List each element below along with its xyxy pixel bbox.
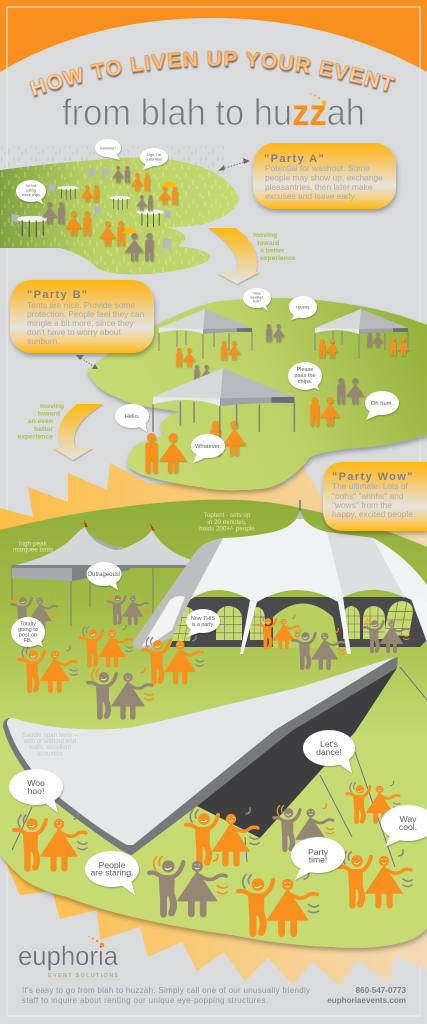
front orange pair [146,433,187,473]
moving toward an even better experience: experience [17,434,53,440]
tent guy lines [12,667,427,867]
bubble: Way cool [381,805,427,847]
bubble: Totally: going to [18,627,38,633]
bubble: chips: I'm not [26,184,36,188]
Toptent caption: in 20 minutes, [207,519,247,526]
logo [18,936,119,979]
bubble: Woo hoo: hoo! [28,786,44,796]
rain above party A meadow [0,146,225,176]
white canopy [190,518,427,606]
contact details: euphoriaevents.com [327,996,406,1005]
bubble: People are staring: People [99,860,126,870]
Party A text: Potential for washout. Some [265,163,370,173]
contact details: 860-547-0773 [356,986,406,995]
Toptent caption: Toptent - sets up [204,512,251,519]
Party B heading: "Party B" [27,289,89,301]
people group B [176,324,410,456]
subtitle: from blah to huzzah [62,92,365,133]
umbrellas [122,181,177,233]
dark wall [170,597,427,647]
Toptent caption: holds 200+/- people [199,526,255,532]
bubble: Whatever [191,434,225,463]
Party Wow text: happy, excited people. [332,509,415,519]
bubble: Ugh: Ugh, I'm [147,153,161,157]
back zigzag bunting [0,463,427,560]
bubble: Nice weather [243,288,271,311]
bubble: Nice weather: weather, [250,296,264,300]
moving toward a better experience: a better [260,248,285,254]
moving toward an even better experience: moving [40,403,64,410]
chairs [10,168,172,255]
bubble: Totally [11,617,45,647]
double arrow B [76,355,98,369]
bubble: Nice weather: Nice [253,292,261,296]
Party A heading: "Party A" [264,153,325,165]
moving toward an even better experience: toward [38,410,60,418]
Party B text: Tents are nice. Provide some [27,300,135,310]
saddle span caption: with or without end [23,738,77,745]
bubble: Ugh [140,148,168,170]
tent B small left [159,309,252,359]
bubble: Nice weather: huh? [253,300,261,304]
Party B text: protection. People feel they can [27,309,145,319]
panel: Party A [253,143,396,209]
moving toward an even better experience: better [34,426,53,433]
bubble: Oh hum: Oh hum. [371,401,394,407]
bubble: Hello [115,404,149,432]
footer text: staff to inquire about renting our unique eye-popping structures. [22,996,268,1005]
panel: Party Wow [323,462,427,531]
bubble: Way cool: cool. [399,822,417,832]
logo tagline: EVENT SOLUTIONS [48,973,118,979]
canopy pillars [240,596,427,654]
bubble: People are staring [85,851,139,895]
canopy right panel [327,532,405,598]
bubble: Woo hoo: Woo [27,778,45,788]
people behind tents [194,332,383,383]
tent B small right [315,309,408,359]
bubble: chips: eating [26,188,36,192]
footer text: It's easy to go from blah to huzzah. Simply call one of our unusually friendly [22,986,310,995]
saddle span caption: Saddle span tents – [22,732,78,739]
party A people [42,166,178,261]
moving toward an even better experience: an even [28,418,53,425]
high-peak caption: high-peak [19,540,48,548]
bubble: Whatever: Whatever. [195,444,221,450]
bubble: Let's dance [303,730,355,773]
top tent [133,500,427,654]
bubble: Party time: time! [309,854,327,864]
bubble: Woo hoo [9,769,63,813]
bubble: chips: those chips [22,193,40,197]
bubble: Now THIS: is a party. [192,622,214,628]
double arrow A [218,158,250,171]
panel: party B meadow [87,298,427,490]
bubble: I guess: I guess. [296,304,310,310]
arrow: toward even better experience [53,404,103,460]
panel: Party B [10,280,154,353]
bubble: Please pass: pass the [294,373,316,379]
Party Wow text: "oohs" "ahhhs" and [332,491,404,501]
bottom zigzag bunting [0,850,427,986]
logo dots [88,936,104,947]
Party A text: people may show up, exchange [265,172,383,182]
tent B large [153,368,294,444]
orange top band [0,0,427,72]
Party A text: pleasantries, then later make [265,182,373,192]
central opening [273,604,339,648]
saddle span caption: walls, excellent [28,744,71,751]
moving toward a better experience: toward [257,240,279,247]
icon: bouncing dots above the zz [310,93,326,105]
Party Wow heading: "Party Wow" [332,471,414,483]
bubble: Now THIS [186,609,220,637]
bubble: Please pass: chips. [298,379,313,385]
saddle span tent [3,657,398,855]
bubble: Totally: FB. [24,638,33,644]
moving toward a better experience: experience [260,255,296,262]
bubble: Ugh: outta here [145,158,163,162]
bubble: chips [16,180,46,204]
bubble: Totally: Totally [20,622,36,628]
canopy left wing [133,538,223,650]
bubble: Oh hum [365,391,399,420]
Party Wow text: The ultimate. Lots of [332,481,409,491]
panel: big party hill [0,500,427,948]
Party Wow text: "wows" from the [332,500,392,510]
bubble: Party time: Party [308,847,329,857]
windows [172,601,415,641]
bubble: Outrageous: Outrageous! [87,572,121,578]
moving toward a better experience: moving [253,232,277,239]
bubble: Let's dance: Let's [320,739,338,749]
canopy top cap [296,510,304,519]
title: HOW TO LIVEN UP YOUR EVENT [29,50,396,98]
bubble: Let's dance: dance! [316,747,342,757]
Party B text: don't have to worry about [27,327,121,337]
wing window [142,596,185,646]
Party B text: sunburn. [27,336,60,346]
bubble: Please pass: Please [296,367,314,373]
bubble: Now THIS: Now THIS [191,616,215,622]
euphoria wordmark: euphoria [18,941,119,971]
bubble: Way cool: Way [400,814,417,824]
tables [15,186,164,237]
saddle span caption: acoustics [37,750,63,758]
bubble: Bummer [95,139,121,160]
panel: party A meadow [0,157,239,274]
high-peak caption: marquee tents [13,546,53,554]
bubble: Totally: post on [19,632,37,638]
arrow: toward better experience [208,228,260,284]
Party A text: excuses and leave early. [265,191,357,201]
dancing crowd [12,592,412,934]
bubble: Outrageous [86,562,122,590]
Party B text: mingle a bit more, since they [27,318,134,328]
bubble: People are staring: are staring. [90,868,134,878]
bubble: Bummer: Bummer! [100,146,116,150]
bubble: Please pass [288,362,322,390]
high-peak marquee tent [12,520,192,626]
bubble: Party time [291,837,345,880]
bubble: Hello: Hello. [125,414,140,420]
bubble: I guess [289,296,317,320]
